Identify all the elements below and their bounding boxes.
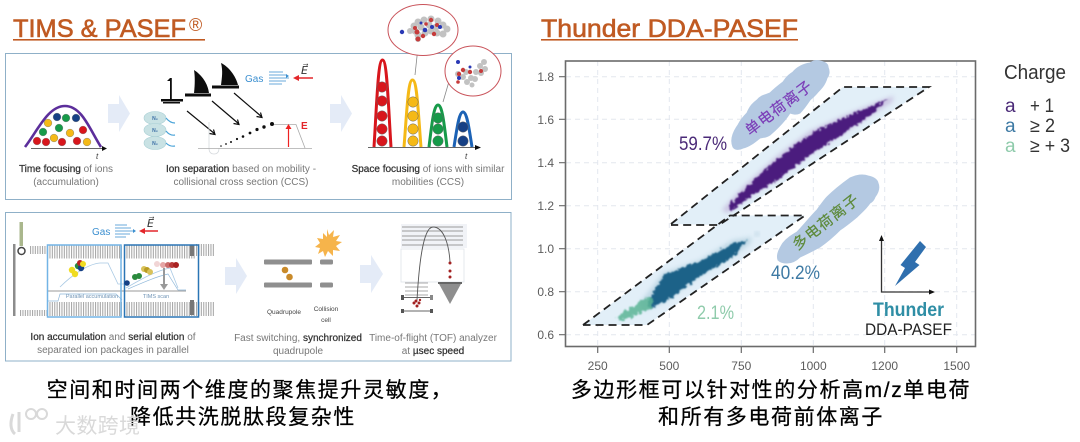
chart: space focusing peaks: t [465, 152, 468, 161]
callout: singly charged ions [732, 60, 829, 149]
icon: molecule callouts [388, 4, 501, 102]
legend: gas and field direction [245, 63, 313, 85]
panel: TIMS workflow [6, 54, 512, 200]
watermark [11, 409, 140, 438]
icon: parallel accumulation and TIMS scan tunnel [13, 222, 214, 317]
legend: gas and field direction: E⃗ [147, 216, 154, 230]
icon: nitrogen clouds: N₂ [152, 116, 158, 122]
label: 2.1%: 2.1% [697, 303, 734, 324]
arrows: ion trajectories [187, 93, 262, 134]
callout: multiply charged ions: 多电荷离子 [790, 191, 863, 254]
legend: gas and field direction: Gas [92, 227, 110, 238]
text: right summary: 和所有多电荷前体离子 [658, 406, 884, 429]
legend: charge: ≥ + 3 [1030, 136, 1070, 157]
icon: quadrupole and collision cell: cell [321, 317, 331, 324]
text: space focusing caption: Space focusing of ions with similar [352, 164, 504, 175]
axis ticks and labels: 1500 [943, 359, 970, 373]
icon: parallel accumulation and TIMS scan tunnel: TIMS scan [143, 294, 169, 300]
legend: charge: Charge [1004, 62, 1066, 84]
axis ticks and labels: 250 [588, 359, 608, 373]
legend: charge: a [1005, 136, 1016, 157]
text: ion accumulation caption: Ion accumulation and serial elution of [30, 332, 196, 343]
label: 59.7%: 59.7% [679, 134, 727, 155]
label: 40.2%: 40.2% [771, 263, 820, 284]
icon: nitrogen clouds: N₂ [152, 141, 158, 147]
axis ticks and labels: 1.2 [537, 199, 554, 213]
axis ticks and labels: 0.6 [537, 328, 554, 342]
axis ticks and labels: 0.8 [537, 285, 554, 299]
heading: TIMS & PASEF: TIMS & PASEF [13, 15, 186, 43]
points: charge ≥2 [640, 232, 760, 311]
heading: TIMS & PASEF: ® [189, 15, 202, 35]
icon: time focusing curve with ions: t [96, 152, 99, 161]
points: charge +1 [722, 96, 894, 213]
icon: quadrupole and collision cell: Collision [314, 306, 338, 313]
text: time focusing caption: Time focusing of ions [19, 164, 113, 175]
icon: time focusing curve with ions [25, 106, 107, 161]
text: ion separation caption: Ion separation based on mobility - [166, 164, 316, 175]
heading: Thunder DDA-PASEF: Thunder DDA-PASEF [541, 15, 798, 43]
axis ticks and labels: 1.4 [537, 156, 554, 170]
axis ticks and labels: 500 [659, 359, 680, 373]
icon: Thunder axes and lightning bolt [879, 235, 935, 294]
text: left summary: 降低共洗脱肽段复杂性 [130, 406, 356, 429]
icon: nitrogen clouds [144, 112, 175, 150]
axis ticks and labels: 1.6 [537, 113, 554, 127]
callout: singly charged ions: 单电荷离子 [742, 78, 816, 139]
chart: scatter of m/z versus mobility [537, 61, 976, 373]
legend: gas and field direction [92, 216, 158, 238]
chart: electric field ramp with ions [198, 121, 312, 154]
label: Thunder DDA-PASEF: Thunder [873, 300, 945, 321]
chart: electric field ramp with ions: E [301, 121, 308, 132]
text: TOF caption: at µsec speed [402, 346, 464, 357]
legend: charge: a [1005, 116, 1016, 137]
arrow: step 1 to 2 [108, 95, 130, 132]
axis ticks and labels: 1000 [800, 359, 827, 373]
legend: charge [1004, 62, 1070, 157]
polygon outlines [583, 87, 929, 325]
icon: quadrupole and collision cell: Quadrupole [267, 309, 301, 316]
arrow: step 1 to 2 [225, 258, 247, 294]
watermark: 大数跨境 [55, 415, 140, 438]
axis ticks and labels: 750 [731, 359, 752, 373]
text: ion accumulation caption: separated ion packages in parallel [37, 345, 189, 356]
text: time focusing caption: (accumulation) [33, 177, 99, 188]
text: TOF caption: Time-of-flight (TOF) analyzer [369, 333, 497, 344]
icon: three sailboats [161, 63, 239, 104]
axis ticks and labels: 1200 [871, 359, 898, 373]
text: space focusing caption: mobilities (CCS) [392, 177, 464, 188]
icon: quadrupole and collision cell [264, 229, 342, 324]
text: ion separation caption: collisional cross section (CCS) [173, 177, 309, 188]
arrow: step 2 to 3 [330, 95, 352, 132]
legend: charge: + 1 [1030, 96, 1054, 117]
text: right summary: 多边形框可以针对性的分析高m/z单电荷 [571, 379, 971, 402]
region: singly charged polygon [671, 87, 929, 225]
legend: gas and field direction: Gas [245, 74, 263, 85]
region: multiply charged polygon [583, 216, 805, 325]
label: Thunder DDA-PASEF [865, 300, 952, 339]
icon: parallel accumulation and TIMS scan tunnel: Parallel accumulation [66, 294, 118, 300]
legend: charge: a [1005, 96, 1016, 117]
axis ticks and labels: 1.0 [537, 242, 554, 256]
text: fast switching caption: Fast switching, synchronized [234, 333, 362, 344]
panel: PASEF workflow [6, 212, 511, 361]
legend: charge: ≥ 2 [1030, 116, 1055, 137]
text: left summary: 空间和时间两个维度的聚焦提升灵敏度， [47, 379, 453, 402]
axis ticks and labels [537, 70, 970, 373]
legend: gas and field direction: E⃗ [301, 63, 308, 77]
icon: nitrogen clouds: N₂ [152, 128, 158, 134]
callout: multiply charged ions [777, 175, 879, 263]
text: fast switching caption: quadrupole [273, 346, 323, 357]
arrow: step 2 to 3 [360, 255, 383, 293]
icon: time-of-flight analyzer [401, 224, 467, 313]
axis ticks and labels: 1.8 [537, 70, 554, 84]
chart: space focusing peaks [368, 60, 481, 161]
label: Thunder DDA-PASEF: DDA-PASEF [865, 320, 952, 339]
points: charge ≥+3 [616, 297, 654, 321]
